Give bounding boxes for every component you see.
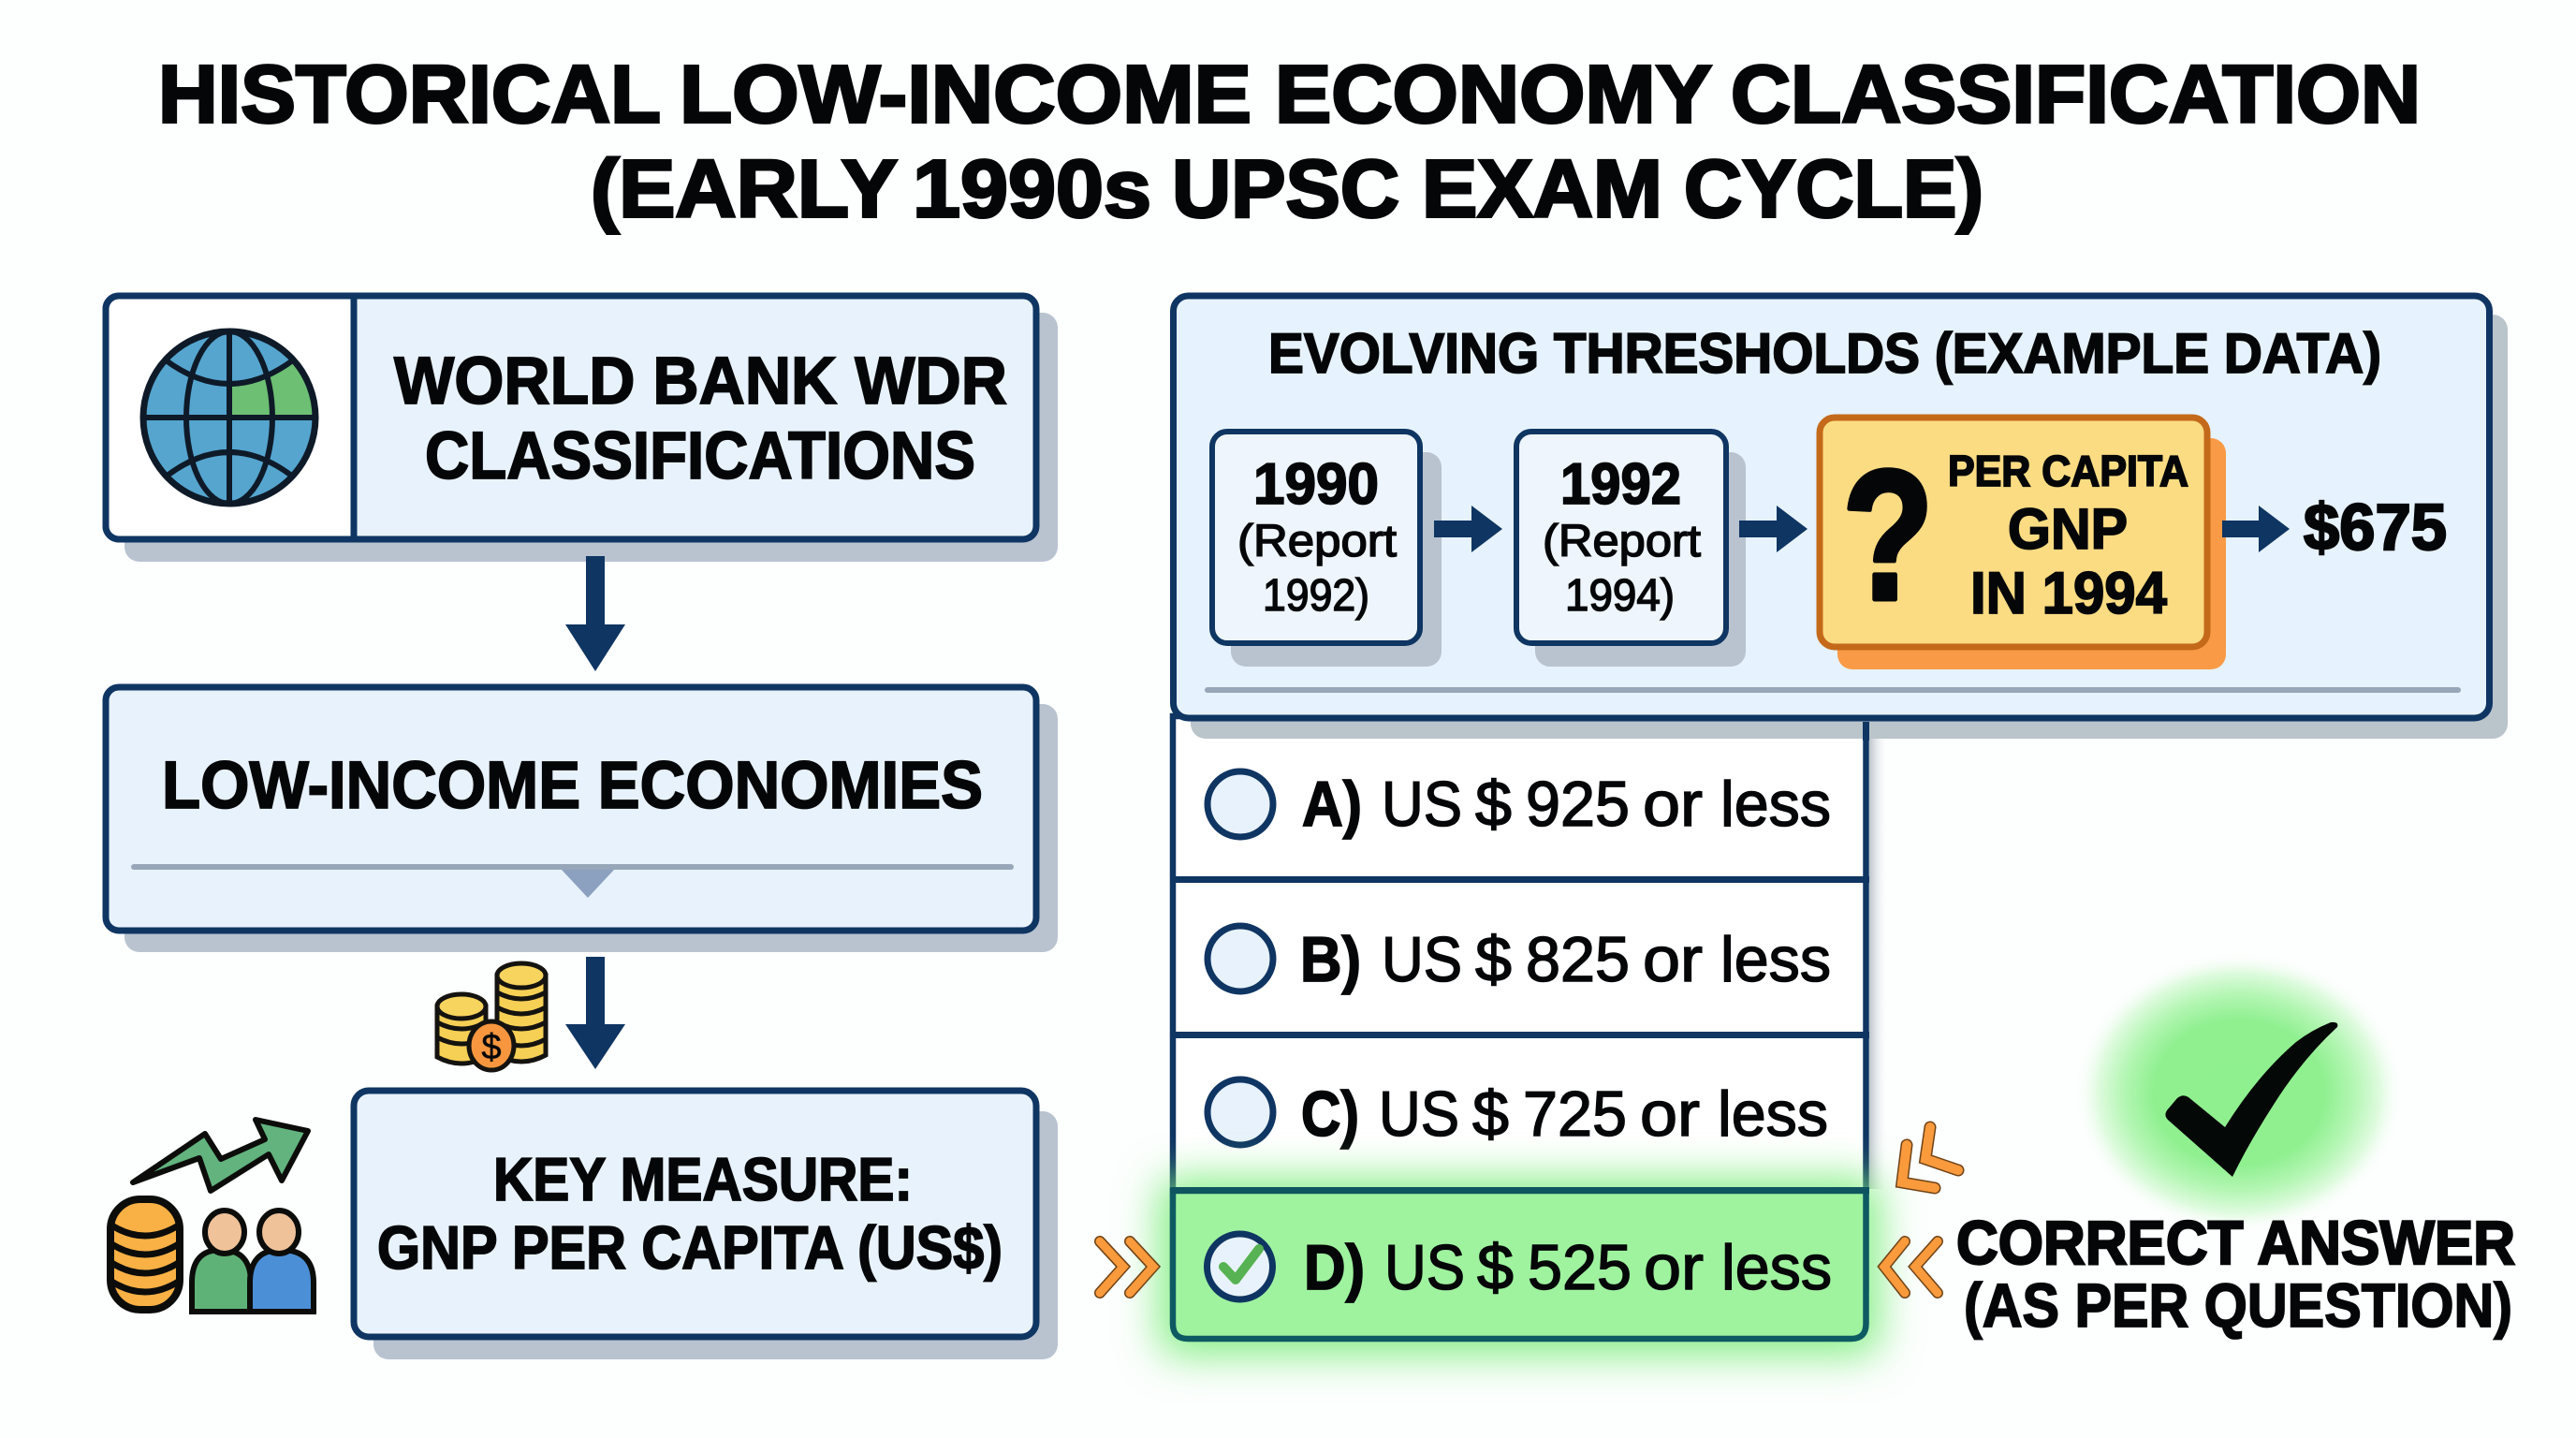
card: per capita GNP in 1994: ? (1842, 432, 1934, 638)
title: UPSC (1172, 144, 1399, 234)
callout: correct answer: (AS PER QUESTION) (1964, 1270, 2512, 1340)
option C: 725 (1523, 1078, 1627, 1150)
panel: evolving thresholds (1174, 296, 2508, 739)
option B: $ (1475, 924, 1512, 995)
panel: option D correct (1170, 1187, 1869, 1339)
heading: low-income economies: LOW-INCOME ECONOMIES (162, 749, 983, 823)
option B: less (1720, 924, 1831, 995)
divider: options right edge over shadow (1863, 722, 1869, 741)
option C: less (1718, 1078, 1828, 1150)
arrow: down to low-income (565, 556, 625, 671)
panel: low-income economies (106, 687, 1058, 952)
option C: US (1379, 1078, 1459, 1150)
option C: or (1640, 1078, 1700, 1150)
option C: C) (1301, 1078, 1359, 1150)
arrow: 1990 to 1992 (1434, 506, 1502, 552)
icon: coin stacks (437, 963, 546, 1070)
glow behind big check (2074, 952, 2404, 1233)
card: 1990 (1212, 432, 1442, 667)
card: per capita GNP in 1994 (1820, 418, 2226, 669)
icon: chevrons from label pointing at option D (1884, 1241, 1938, 1293)
heading: Classifications: CLASSIFICATIONS (425, 419, 975, 493)
option A (1208, 769, 1831, 840)
arrow: 1992 to question (1739, 506, 1808, 552)
value: $675: $675 (2304, 491, 2447, 564)
text: GNP per capita: GNP PER CAPITA (US$) (377, 1213, 1003, 1282)
card: per capita GNP in 1994: IN 1994 (1970, 561, 2167, 626)
panel: answer options (1171, 716, 1888, 1287)
icon: small pointer (562, 870, 614, 898)
option A: A) (1302, 769, 1362, 840)
option B: US (1382, 924, 1462, 995)
card: 1992 (1516, 432, 1746, 667)
panel: World Bank WDR classifications (106, 296, 1058, 562)
text: key measure: KEY MEASURE: (493, 1145, 913, 1213)
option A: less (1720, 769, 1831, 840)
title: 1990s (913, 144, 1151, 234)
heading: World Bank WDR: WORLD BANK WDR (394, 345, 1007, 418)
card: 1990: (Report (1237, 517, 1397, 566)
option A: US (1382, 769, 1462, 840)
card: per capita GNP in 1994: GNP (2008, 497, 2128, 561)
option B (1208, 924, 1831, 995)
card: 1990: 1990 (1253, 452, 1379, 517)
card: 1992: (Report (1543, 517, 1701, 566)
icon: globe (139, 328, 323, 507)
icon: corner chevrons (1902, 1127, 1958, 1188)
card: 1992: 1994) (1565, 571, 1675, 621)
option C (1208, 1078, 1828, 1150)
highlight glow: option D (1159, 1178, 1880, 1356)
heading: evolving thresholds: EVOLVING THRESHOLDS (EXAMPLE DATA) (1268, 322, 2381, 385)
option A: or (1643, 769, 1703, 840)
card: per capita GNP in 1994: PER CAPITA (1948, 447, 2188, 495)
panel: option D correct: 525 (1528, 1232, 1632, 1303)
panel: key measure (354, 1091, 1058, 1359)
icon: coin stacks: $ (481, 1028, 502, 1067)
title: EXAM (1422, 144, 1662, 234)
title: LOW-INCOME (680, 49, 1251, 140)
callout: correct answer (1956, 1208, 2515, 1340)
title: HISTORICAL (158, 49, 661, 140)
option C: $ (1472, 1078, 1509, 1150)
icon: chevrons pointing at option D from left (1100, 1241, 1153, 1293)
option B: 825 (1526, 924, 1630, 995)
icon: small check (1223, 1249, 1259, 1280)
card: 1992: 1992 (1560, 452, 1681, 517)
option A: $ (1475, 769, 1512, 840)
panel: option D correct: less (1721, 1232, 1832, 1303)
arrow: to $675 (2222, 506, 2290, 552)
callout: correct answer: CORRECT ANSWER (1956, 1208, 2515, 1277)
panel: option D correct: US (1384, 1232, 1465, 1303)
panel: option D correct: or (1644, 1232, 1704, 1303)
panel: option D correct: $ (1477, 1232, 1514, 1303)
option A: 925 (1526, 769, 1630, 840)
arrow: down to key measure (565, 957, 625, 1069)
option B: or (1643, 924, 1703, 995)
option B: B) (1300, 924, 1361, 995)
card: 1990: 1992) (1263, 571, 1369, 621)
icon: growth arrow, coins and people (110, 1120, 314, 1312)
title: (EARLY (591, 144, 898, 234)
title: CYCLE) (1684, 144, 1983, 234)
icon: big check mark (2165, 1022, 2337, 1177)
title: CLASSIFICATION (1731, 49, 2421, 140)
title: ECONOMY (1275, 49, 1712, 140)
title (158, 49, 2421, 234)
panel: option D correct: D) (1304, 1232, 1365, 1303)
